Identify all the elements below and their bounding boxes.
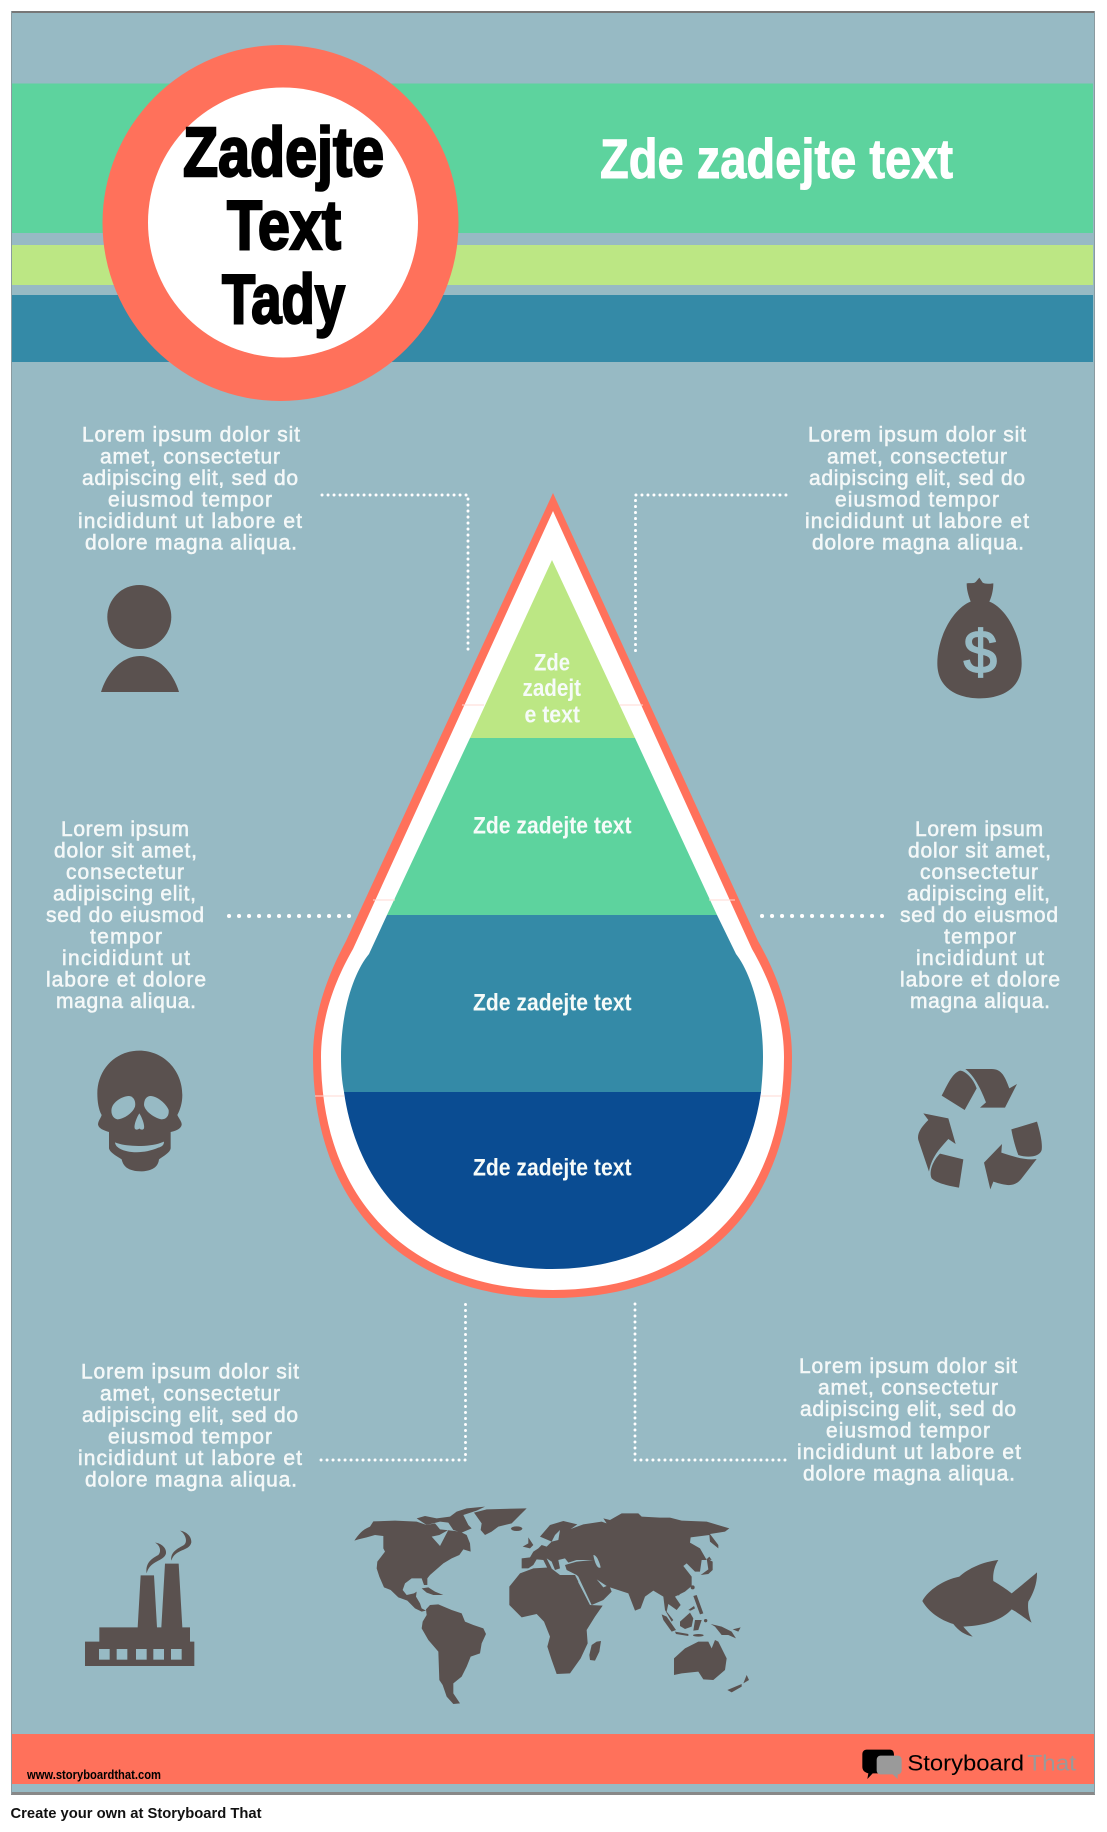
drop labels: Zde zadejte text xyxy=(473,813,632,840)
text block: middle right: dolor sit amet, xyxy=(908,840,1051,862)
text block: middle right: tempor xyxy=(944,926,1016,948)
text block: middle left xyxy=(46,818,206,1013)
drop layer 3 green xyxy=(387,738,717,915)
text block: bottom left xyxy=(78,1361,302,1491)
icon: fish xyxy=(922,1560,1037,1637)
drop labels: Zde xyxy=(534,650,570,676)
credit line: Create your own at Storyboard That xyxy=(10,1805,262,1822)
text block: middle left: Lorem ipsum xyxy=(61,818,189,841)
icon: skull xyxy=(97,1051,182,1171)
text block: middle right: sed do eiusmod xyxy=(900,904,1058,927)
logo xyxy=(862,1750,1076,1779)
text block: middle left: labore et dolore xyxy=(46,968,206,992)
water drop xyxy=(313,493,792,1298)
text block: middle right: adipiscing elit, xyxy=(907,882,1050,906)
text block: bottom right: incididunt ut labore et xyxy=(797,1441,1021,1464)
text block: middle right xyxy=(900,818,1060,1013)
drop layer 4 lime xyxy=(470,560,635,738)
icon: money bag: $ xyxy=(964,618,997,685)
text block: bottom left: amet, consectetur xyxy=(100,1382,280,1405)
text block: bottom left: Lorem ipsum dolor sit xyxy=(81,1361,299,1384)
text block: middle left: magna aliqua. xyxy=(56,990,196,1013)
text block: top right: amet, consectetur xyxy=(827,445,1007,468)
text block: middle left: incididunt ut xyxy=(62,947,190,970)
title: Text xyxy=(227,186,341,264)
text block: middle right: magna aliqua. xyxy=(910,990,1050,1013)
text block: middle right: labore et dolore xyxy=(900,968,1060,992)
text block: bottom right xyxy=(797,1355,1021,1486)
drop outline xyxy=(313,493,792,1298)
footer url: www.storyboardthat.com xyxy=(26,1767,161,1782)
footer band xyxy=(12,1734,1094,1784)
drop labels: Zde zadejte text xyxy=(473,1155,632,1182)
drop labels: Zde zadejte text xyxy=(473,989,632,1016)
text block: bottom right: adipiscing elit, sed do xyxy=(800,1398,1016,1421)
title xyxy=(183,113,384,338)
text block: top right xyxy=(805,424,1029,554)
text block: top right: dolore magna aliqua. xyxy=(812,531,1024,554)
text block: top left: dolore magna aliqua. xyxy=(85,531,297,554)
text block: middle right: consectetur xyxy=(920,861,1038,884)
text block: top left: amet, consectetur xyxy=(100,445,280,468)
text block: top left: eiusmod tempor xyxy=(108,488,272,511)
text block: bottom right: amet, consectetur xyxy=(818,1377,998,1400)
text block: bottom left: adipiscing elit, sed do xyxy=(82,1404,298,1427)
drop layer 2 blue xyxy=(341,915,763,1092)
text block: top right: Lorem ipsum dolor sit xyxy=(808,424,1026,447)
title circle xyxy=(102,45,458,401)
text block: middle left: tempor xyxy=(90,926,162,948)
text block: middle left: dolor sit amet, xyxy=(54,840,197,862)
title: Zadejte xyxy=(183,113,384,191)
text block: bottom left: incididunt ut labore et xyxy=(78,1447,302,1470)
icon: recycle xyxy=(918,1069,1042,1189)
drop labels: zadejt xyxy=(522,675,581,702)
drop white band xyxy=(321,511,784,1290)
icon: money bag xyxy=(937,578,1022,698)
text block: middle left: consectetur xyxy=(66,861,184,884)
drop layer 1 navy xyxy=(344,1092,761,1269)
icon: person xyxy=(101,585,179,692)
drop labels xyxy=(473,650,632,1182)
text block: bottom left: dolore magna aliqua. xyxy=(85,1468,297,1491)
header bands xyxy=(12,84,1093,362)
header subtitle: Zde zadejte text xyxy=(600,127,953,190)
dotted connectors xyxy=(229,495,882,1460)
icon: world map xyxy=(354,1507,749,1704)
text block: top right: incididunt ut labore et xyxy=(805,510,1029,533)
text block: top right: adipiscing elit, sed do xyxy=(809,467,1025,490)
text block: bottom right: Lorem ipsum dolor sit xyxy=(799,1355,1017,1378)
logo text: Storyboard xyxy=(907,1751,1024,1776)
faint separators xyxy=(315,705,782,1096)
text block: top left: incididunt ut labore et xyxy=(78,510,302,533)
icon: factory xyxy=(85,1531,194,1666)
drop labels: e text xyxy=(524,702,580,728)
title: Tady xyxy=(222,260,345,338)
text block: bottom right: dolore magna aliqua. xyxy=(803,1463,1015,1486)
text block: top left xyxy=(78,424,302,554)
text block: middle right: incididunt ut xyxy=(916,947,1044,970)
text block: bottom left: eiusmod tempor xyxy=(108,1425,272,1448)
text block: top left: adipiscing elit, sed do xyxy=(82,467,298,490)
logo text xyxy=(907,1751,1076,1776)
text block: middle left: adipiscing elit, xyxy=(53,882,196,906)
logo icon xyxy=(862,1750,902,1779)
text block: top left: Lorem ipsum dolor sit xyxy=(82,424,300,447)
logo text: That xyxy=(1027,1751,1076,1776)
text block: top right: eiusmod tempor xyxy=(835,488,999,511)
text block: middle left: sed do eiusmod xyxy=(46,904,204,927)
text block: middle right: Lorem ipsum xyxy=(915,818,1043,841)
text block: bottom right: eiusmod tempor xyxy=(826,1420,990,1443)
